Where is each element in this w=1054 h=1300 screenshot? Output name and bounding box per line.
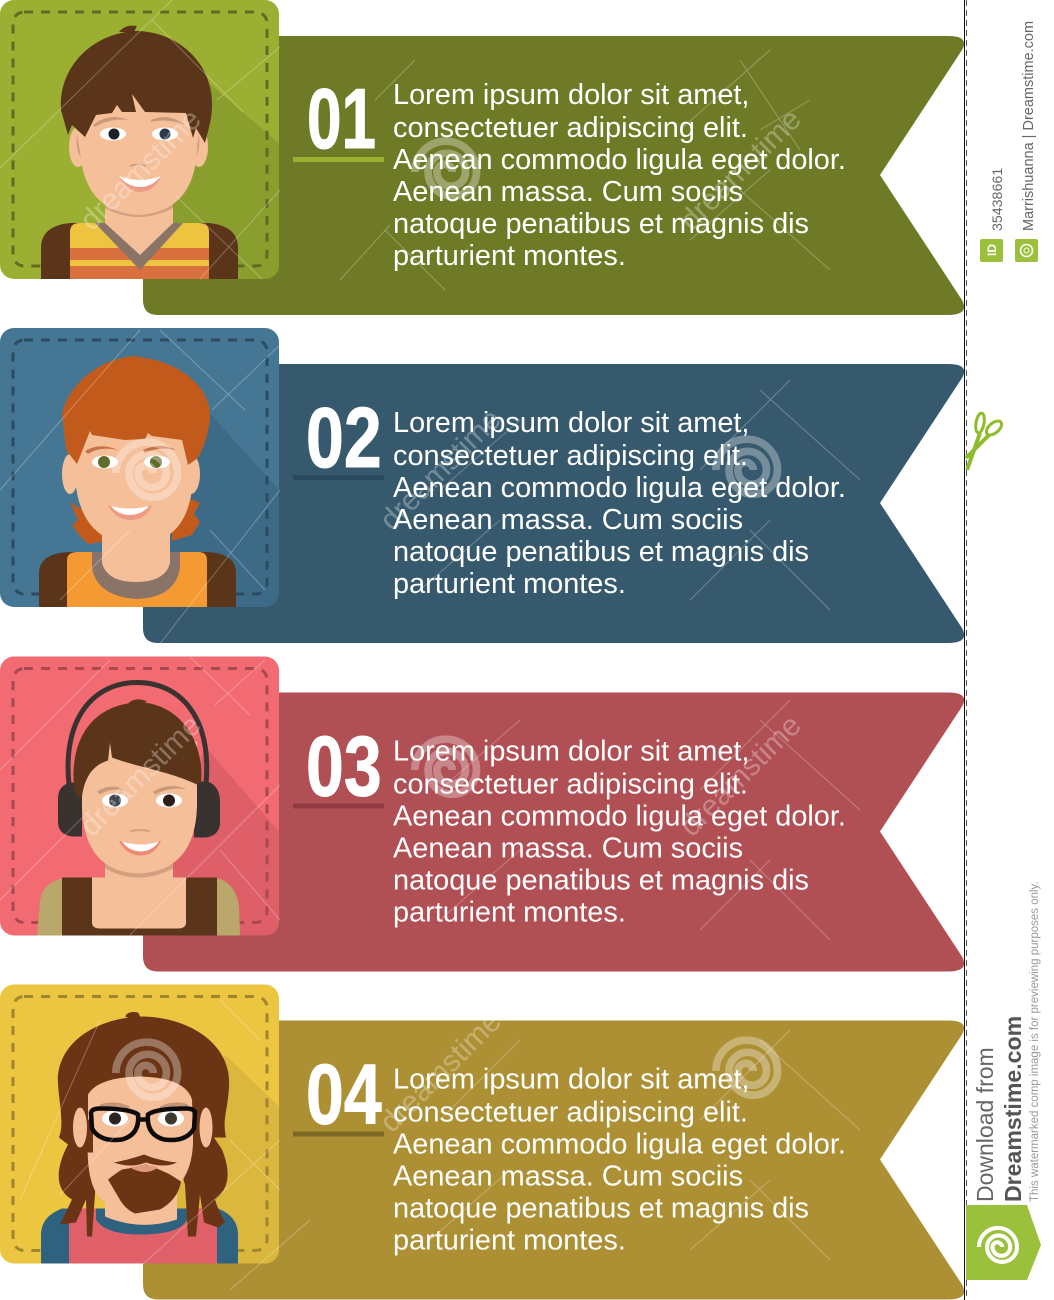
- ribbon 2: [143, 364, 964, 643]
- icon: green logo tab: [966, 1205, 1041, 1280]
- watermark spirals: [116, 141, 777, 1097]
- watermark text: dreamstime: [674, 709, 808, 843]
- watermark text: dreamstime: [374, 1005, 508, 1139]
- avatar: man with glasses and beard: [41, 1012, 238, 1264]
- text block 2: Lorem ipsum dolor sit amet,: [393, 407, 749, 439]
- ribbon 1: [143, 36, 964, 315]
- text block 2: Aenean commodo ligula eget dolor.: [393, 472, 846, 504]
- text block 1: parturient montes.: [393, 240, 626, 272]
- avatar card 4: [0, 984, 279, 1264]
- text block 3: Aenean massa. Cum sociis: [393, 832, 743, 864]
- text block 1: Lorem ipsum dolor sit amet,: [393, 79, 749, 111]
- watermark text: dreamstime: [74, 103, 208, 237]
- text block 3: consectetuer adipiscing elit.: [393, 768, 748, 800]
- text block 4: natoque penatibus et magnis dis: [393, 1192, 809, 1224]
- icon: scissors: [966, 412, 1004, 470]
- image id: 35438661: [990, 168, 1006, 231]
- id label: [980, 168, 1006, 262]
- avatar: red-haired person in orange shirt: [39, 356, 236, 607]
- text block 3: parturient montes.: [393, 896, 626, 928]
- underline 4: [293, 1132, 384, 1136]
- watermark text: dreamstime: [374, 403, 508, 537]
- number 04: 04: [306, 1047, 382, 1142]
- text block 4: parturient montes.: [393, 1224, 626, 1256]
- text block 1: consectetuer adipiscing elit.: [393, 112, 748, 144]
- notice: This watermarked comp image is for previewing purposes only.: [1029, 881, 1041, 1202]
- row 4: profile with ribbon: [0, 984, 964, 1300]
- watermark text: dreamstime: [74, 709, 208, 843]
- avatar card 1: [0, 0, 279, 279]
- watermark text: [74, 103, 808, 1139]
- underline 1: [293, 157, 384, 162]
- avatar card 2: [0, 328, 279, 607]
- text block 4: Aenean commodo ligula eget dolor.: [393, 1128, 846, 1160]
- text block 2: parturient montes.: [393, 568, 626, 600]
- text block 4: consectetuer adipiscing elit.: [393, 1096, 748, 1128]
- text block 2: consectetuer adipiscing elit.: [393, 440, 748, 472]
- text block 3: Aenean commodo ligula eget dolor.: [393, 800, 846, 832]
- underline 2: [293, 475, 384, 480]
- number 02: 02: [306, 391, 382, 486]
- row 3: profile with ribbon: [0, 656, 964, 972]
- text block 4: Lorem ipsum dolor sit amet,: [393, 1064, 749, 1096]
- author credit: [1015, 21, 1038, 262]
- row 1: profile with ribbon: [0, 0, 964, 315]
- label: dreamstime.com: Dreamstime.com: [1000, 1016, 1026, 1202]
- text block 2: natoque penatibus et magnis dis: [393, 536, 809, 568]
- text block 3: Lorem ipsum dolor sit amet,: [393, 736, 749, 768]
- download badge: [966, 881, 1041, 1280]
- cut line: [964, 0, 966, 1300]
- text block 1: Aenean commodo ligula eget dolor.: [393, 144, 846, 176]
- text block 1: natoque penatibus et magnis dis: [393, 208, 809, 240]
- text block 4: Aenean massa. Cum sociis: [393, 1160, 743, 1192]
- ribbon 3: [143, 692, 964, 972]
- icon: id badge: ID: [985, 244, 999, 256]
- author name: Marrishuanna | Dreamstime.com: [1021, 21, 1037, 231]
- text block 2: Aenean massa. Cum sociis: [393, 504, 743, 536]
- icon: copyright badge: [1015, 239, 1038, 262]
- number 01: 01: [307, 71, 376, 166]
- row 2: profile with ribbon: [0, 328, 964, 643]
- watermark text: dreamstime: [674, 103, 808, 237]
- avatar: person with headphones: [37, 682, 240, 936]
- avatar: boy with striped shirt: [41, 26, 238, 279]
- label: download from: Download from: [972, 1047, 998, 1202]
- text block 1: Aenean massa. Cum sociis: [393, 176, 743, 208]
- avatar card 3: [0, 656, 279, 936]
- number 03: 03: [306, 719, 382, 814]
- ribbon 4: [143, 1020, 964, 1300]
- underline 3: [293, 804, 384, 808]
- text block 3: natoque penatibus et magnis dis: [393, 864, 809, 896]
